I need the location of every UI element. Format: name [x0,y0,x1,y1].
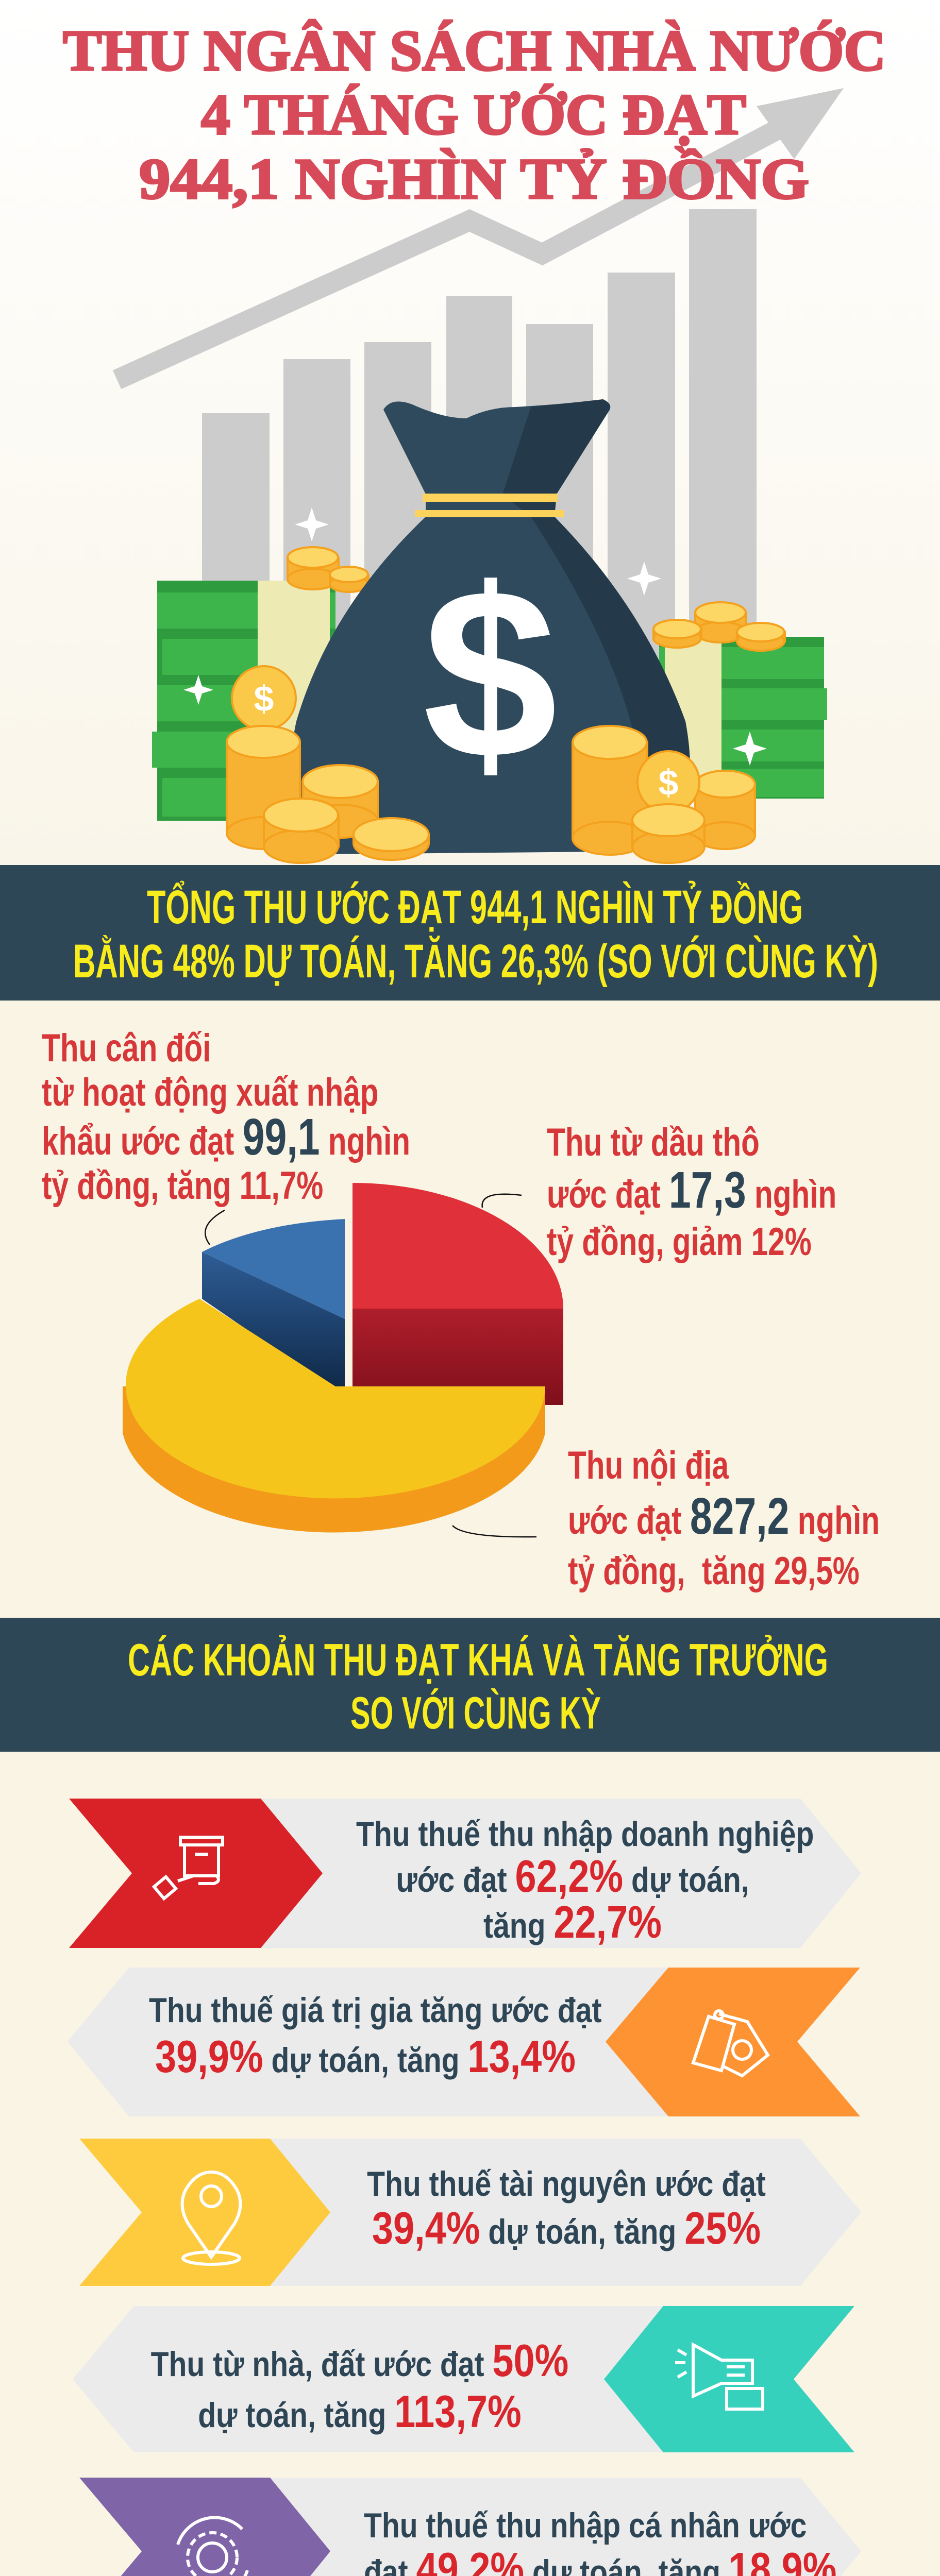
pie label: domestic [568,1444,880,1593]
icon: megaphone [675,2345,763,2409]
pie label: import export: tỷ đồng, tăng 11,7% [42,1164,323,1208]
front coins: $ [254,679,274,719]
pie label: domestic: Thu nội địa [568,1444,729,1487]
pie chart [123,1183,563,1537]
pie label: import export: Thu cân đối [42,1026,211,1070]
pie label: import export: khẩu ước đạt 99,1 nghìn [42,1108,410,1166]
icon: price tags [693,2011,768,2076]
icon: box in hand [154,1837,223,1899]
item 1: corporate income tax: ước đạt 62,2% dự toán, [396,1851,749,1902]
blue slice [202,1219,345,1386]
item 4: land and housing: dự toán, tăng 113,7% [198,2386,522,2437]
cash right [659,637,827,799]
title: 944,1 NGHÌN TỶ ĐỒNG [139,146,809,211]
icon: gear cycle [178,2518,247,2576]
banner: total revenue [0,865,940,1001]
item 3: resource tax [79,2139,861,2286]
item 3: resource tax: 39,4% dự toán, tăng 25% [372,2202,761,2253]
pie label: domestic: ước đạt 827,2 nghìn [568,1487,880,1545]
item 4: land and housing [73,2306,854,2452]
banner: revenue items [0,1618,940,1752]
illustration: money bag chart [112,88,844,864]
pie label: import export [42,1026,410,1208]
pie label: crude oil: ước đạt 17,3 nghìn [547,1161,836,1219]
banner: revenue items: SO VỚI CÙNG KỲ [350,1687,601,1738]
pie label: domestic: tỷ đồng, tăng 29,5% [568,1549,860,1593]
item 1: corporate income tax: Thu thuế thu nhập doanh nghiệp [356,1815,814,1854]
item 1: corporate income tax [69,1799,861,1948]
pie label: crude oil: tỷ đồng, giảm 12% [547,1220,812,1264]
yellow slice [123,1299,545,1533]
pie label: crude oil: Thu từ dầu thô [547,1121,760,1164]
item 4: land and housing: Thu từ nhà, đất ước đạt 50% [151,2335,568,2386]
title [63,19,886,211]
item 1: corporate income tax: tăng 22,7% [483,1896,662,1947]
pie label: crude oil [547,1121,836,1264]
title: 4 THÁNG ƯỚC ĐẠT [201,83,746,147]
top coin stacks [288,547,785,651]
item 5: personal income tax [79,2478,861,2576]
item 5: personal income tax: Thu thuế thu nhập cá nhân ước [364,2506,807,2545]
arrows [205,1194,536,1537]
item 2: VAT: 39,9% dự toán, tăng 13,4% [155,2031,576,2082]
item 2: VAT: Thu thuế giá trị gia tăng ước đạt [149,1991,602,2030]
header illustration background [0,0,940,866]
money bag: $ [423,538,558,809]
cash left [152,581,335,821]
icon: location pin [182,2172,240,2264]
item 3: resource tax: Thu thuế tài nguyên ước đạt [367,2164,766,2204]
red slice [352,1183,563,1405]
money bag [291,399,690,854]
front coins: $ [659,762,678,803]
front coins [227,666,755,863]
pie label: import export: từ hoạt động xuất nhập [42,1071,379,1114]
title: THU NGÂN SÁCH NHÀ NƯỚC [63,19,886,83]
item 2: VAT [68,1968,860,2116]
